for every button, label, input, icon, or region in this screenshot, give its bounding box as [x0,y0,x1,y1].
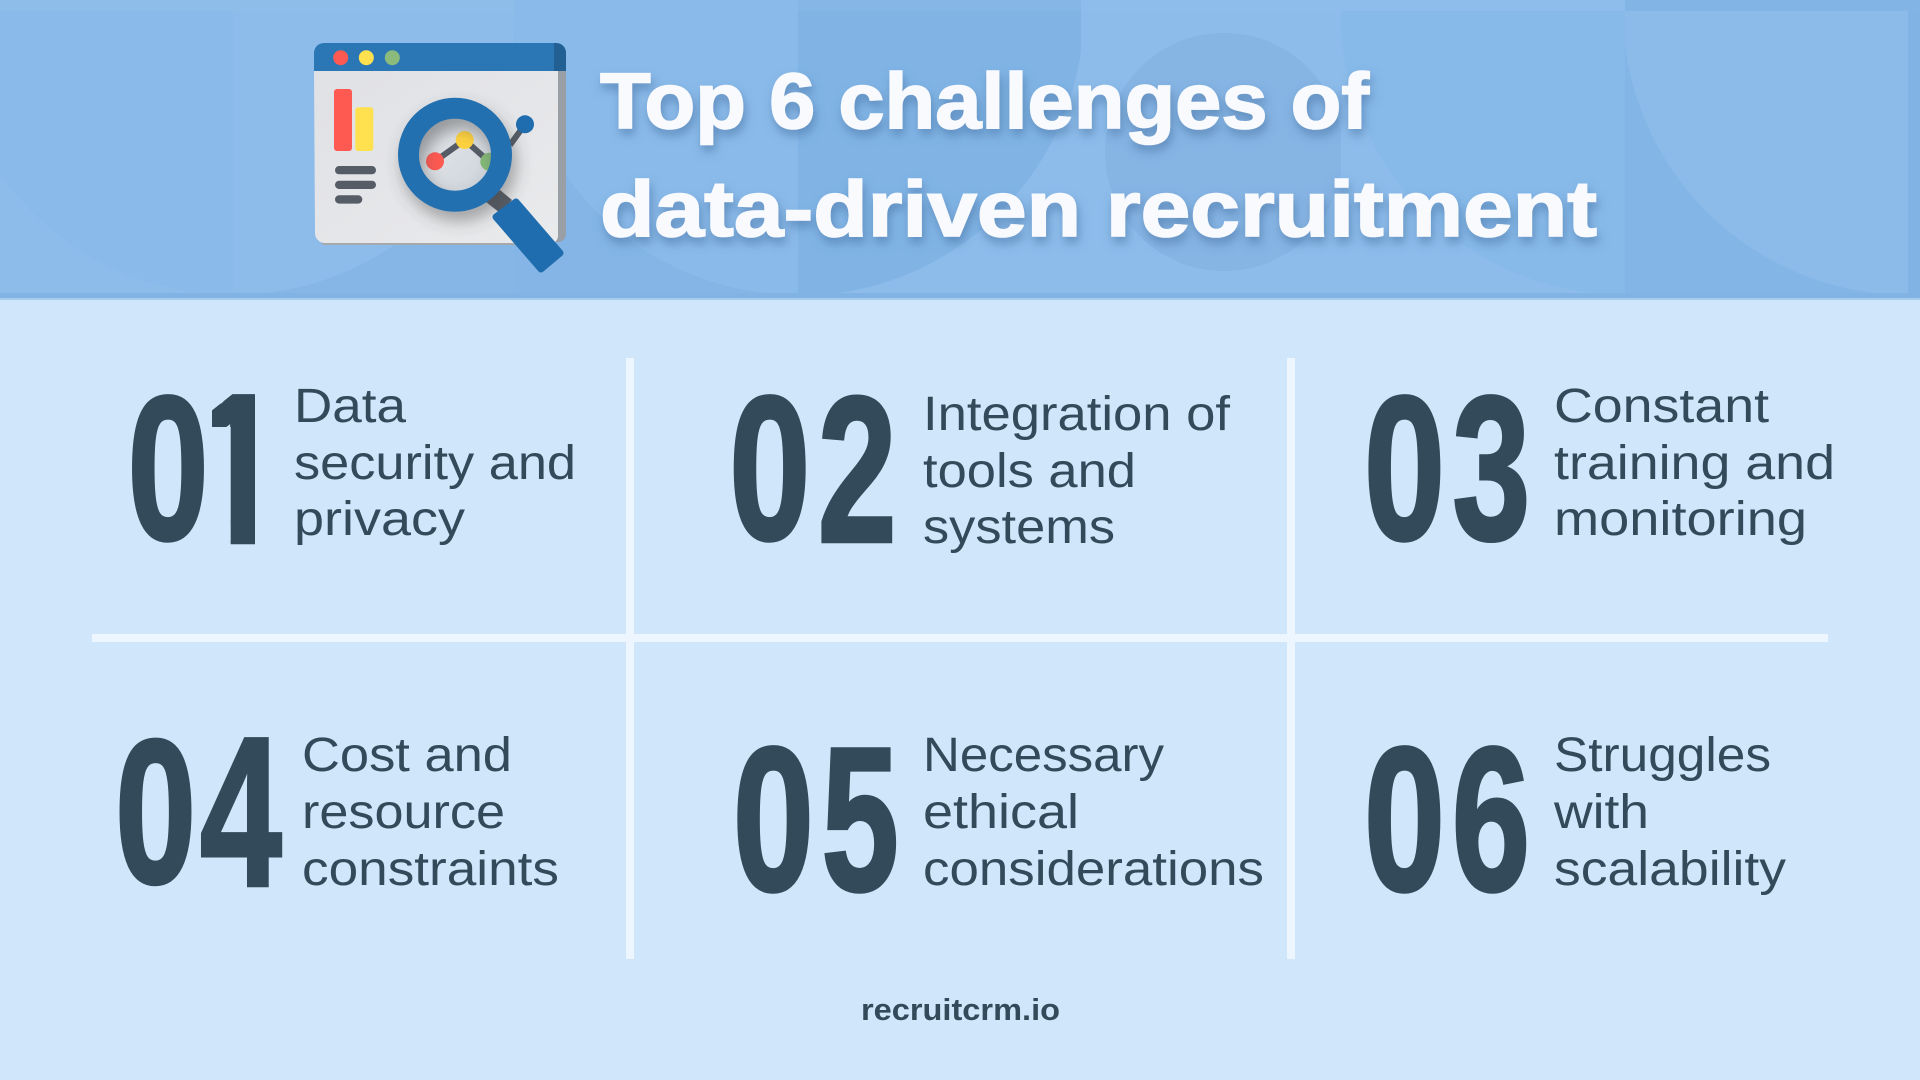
text: struggles with scalability: scalability [1554,843,1786,896]
text: cost and resource constraints: Cost and [302,729,512,782]
number 04 [115,692,282,931]
text: cost and resource constraints [302,729,559,896]
panel: item 01 [128,351,576,588]
magnifier lens [415,115,495,195]
text: struggles with scalability: with [1553,786,1649,839]
mini bar chart [334,89,373,151]
text: constant training and monitoring: Constant [1554,380,1769,433]
title [600,56,1597,253]
text: constant training and monitoring: training and [1554,437,1835,490]
number 04: 0 [115,697,196,926]
text: data security and privacy: security and [294,437,576,490]
text: cost and resource constraints: constraints [302,843,559,896]
magnifying glass [408,108,560,269]
text: necessary ethical considerations [923,729,1264,896]
header banner [0,0,1920,300]
number 01 [132,394,255,544]
number 02: 2 [818,353,897,586]
text: constant training and monitoring: monitoring [1554,493,1807,546]
text: data security and privacy [294,380,576,546]
grid dividers [92,358,1828,959]
number 06: 0 [1364,705,1445,934]
text: integration of tools and systems [923,388,1231,554]
title: Top 6 challenges of [600,56,1370,145]
text: integration of tools and systems: tools and [923,445,1136,498]
text: integration of tools and systems: Integration of [923,388,1231,441]
text: data security and privacy: privacy [294,493,465,546]
panel: item 05 [733,705,1264,934]
footer brand: recruitcrm.io [861,992,1060,1027]
number 03 [1364,354,1530,583]
text: struggles with scalability [1553,729,1786,896]
text: necessary ethical considerations: considerations [923,843,1264,896]
number 01: 1 [191,351,288,588]
text: constant training and monitoring [1554,380,1835,546]
text: cost and resource constraints: resource [302,786,505,839]
text: necessary ethical considerations: ethical [923,786,1079,839]
panel: item 06 [1364,705,1786,934]
panel: item 02 [729,353,1231,586]
icon: browser window with magnifying glass [314,43,566,269]
number 05: 0 [733,705,814,934]
line chart [426,115,534,171]
number 06: 6 [1452,706,1530,934]
number 04: 4 [200,692,282,931]
number 05: 5 [822,705,899,934]
text: struggles with scalability: Struggles [1554,729,1771,782]
number 03: 3 [1452,354,1530,583]
panel: item 04 [115,692,559,931]
number 01: 0 [128,354,209,583]
number 05 [733,705,899,934]
text: necessary ethical considerations: Necessary [923,729,1164,782]
window control dots [333,50,400,65]
text: data security and privacy: Data [294,380,406,433]
number 02 [729,353,897,586]
panel: item 03 [1364,354,1835,583]
text: integration of tools and systems: systems [923,501,1115,554]
number 06 [1364,705,1530,934]
title: data-driven recruitment [600,164,1597,253]
window body [314,43,566,245]
number 03: 0 [1364,354,1445,583]
number 02: 0 [729,354,810,583]
text lines [335,166,376,204]
